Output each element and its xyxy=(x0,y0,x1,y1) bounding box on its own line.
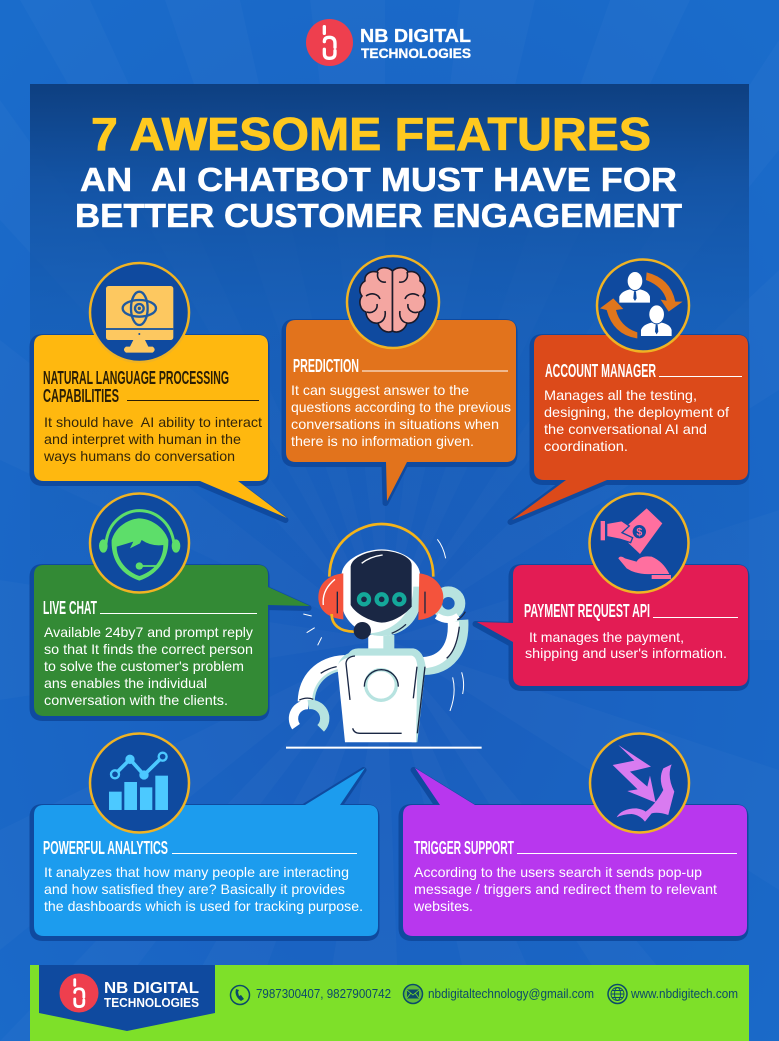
panel: powerful analytics xyxy=(32,734,378,938)
robot illustration xyxy=(286,524,482,749)
panel: prediction: conversations in situations when xyxy=(291,417,499,432)
contact: website: www.nbdigitech.com xyxy=(630,986,738,1001)
top logo: NB DIGITAL xyxy=(360,25,471,46)
panel: powerful analytics: It analyzes that how many people are interacting xyxy=(44,865,349,880)
panel: account manager xyxy=(510,260,748,522)
panel: live chat: so that It finds the correct person xyxy=(44,642,253,657)
icon: trigger arrow and book xyxy=(613,745,674,822)
panel: trigger support: websites. xyxy=(413,899,473,914)
panel: account manager: Manages all the testing, xyxy=(544,388,697,403)
top logo: TECHNOLOGIES xyxy=(361,45,471,61)
icon: analytics chart xyxy=(109,753,168,810)
icon: monitor with atom xyxy=(106,286,173,353)
panel: live chat xyxy=(32,494,310,718)
panel: account manager: coordination. xyxy=(544,439,628,454)
panel: natural language processing: and interpret with human in the xyxy=(44,432,241,447)
footer logo: NB DIGITAL xyxy=(104,980,199,997)
panel: payment request api: shipping and user's information. xyxy=(525,646,727,661)
panel: prediction: It can suggest answer to the xyxy=(291,383,469,398)
icon: hands with money: $ xyxy=(636,527,642,539)
contact: email: nbdigitaltechnology@gmail.com xyxy=(428,986,594,1001)
icon: brain xyxy=(360,268,425,332)
panel: payment request api: PAYMENT REQUEST API xyxy=(524,601,650,621)
main panel xyxy=(30,84,749,644)
floor line xyxy=(286,747,482,749)
panel: payment request api: It manages the payment, xyxy=(529,630,684,645)
panel: prediction xyxy=(284,256,516,503)
icon: hands with money xyxy=(601,508,671,579)
panel: trigger support: TRIGGER SUPPORT xyxy=(414,838,514,858)
panel: trigger support: message / triggers and redirect them to relevant xyxy=(414,882,717,897)
panel: natural language processing xyxy=(32,263,287,520)
right arm xyxy=(423,592,465,667)
panel: live chat: conversation with the clients. xyxy=(44,693,228,708)
panel: live chat: LIVE CHAT xyxy=(43,598,97,618)
panel: prediction: PREDICTION xyxy=(293,356,359,376)
panel: natural language processing: CAPABILITIES xyxy=(43,386,119,406)
panel: live chat: to solve the customer's problem xyxy=(44,659,244,674)
icon: account managers with arrows xyxy=(600,272,683,338)
panel: powerful analytics: POWERFUL ANALYTICS xyxy=(43,838,168,858)
panel: account manager: designing, the deployment of xyxy=(544,405,729,420)
contact: phone xyxy=(230,986,391,1004)
title: AN AI CHATBOT MUST HAVE FOR xyxy=(80,162,677,199)
panel: trigger support xyxy=(402,734,747,938)
contact: website xyxy=(608,984,738,1004)
head xyxy=(318,549,443,636)
headset band xyxy=(329,524,433,577)
contact: phone: 7987300407, 9827900742 xyxy=(256,986,391,1001)
footer logo xyxy=(39,965,215,1031)
panel: account manager: ACCOUNT MANAGER xyxy=(545,361,656,381)
motion lines xyxy=(303,539,464,711)
panel: prediction: questions according to the previous xyxy=(291,400,511,415)
footer xyxy=(30,965,749,1041)
panel: powerful analytics: the dashboards which is used for tracking purpose. xyxy=(44,899,363,914)
title: BETTER CUSTOMER ENGAGEMENT xyxy=(75,198,683,235)
microphone xyxy=(332,614,371,639)
icon: headset agent xyxy=(99,511,180,581)
panel: live chat: ans enables the individual xyxy=(44,676,207,691)
panel: natural language processing: NATURAL LANGUAGE PROCESSING xyxy=(43,368,229,388)
panel: account manager: the conversational AI and xyxy=(544,422,707,437)
title xyxy=(75,108,683,235)
torso xyxy=(337,635,426,742)
panel: live chat: Available 24by7 and prompt reply xyxy=(44,625,253,640)
footer logo: TECHNOLOGIES xyxy=(104,996,199,1010)
left arm xyxy=(293,663,345,728)
panel: natural language processing: ways humans do conversation xyxy=(43,449,235,464)
panel: powerful analytics: and how satisfied they are? Basically it provides xyxy=(44,882,345,897)
panel: prediction: there is no information given. xyxy=(291,434,474,449)
contact: email xyxy=(404,984,594,1004)
panel: natural language processing: It should have AI ability to interact xyxy=(44,415,262,430)
title: 7 AWESOME FEATURES xyxy=(91,108,651,160)
panel: trigger support: According to the users search it sends pop-up xyxy=(414,865,702,880)
top logo xyxy=(306,19,471,66)
panel: payment request api xyxy=(476,494,748,688)
